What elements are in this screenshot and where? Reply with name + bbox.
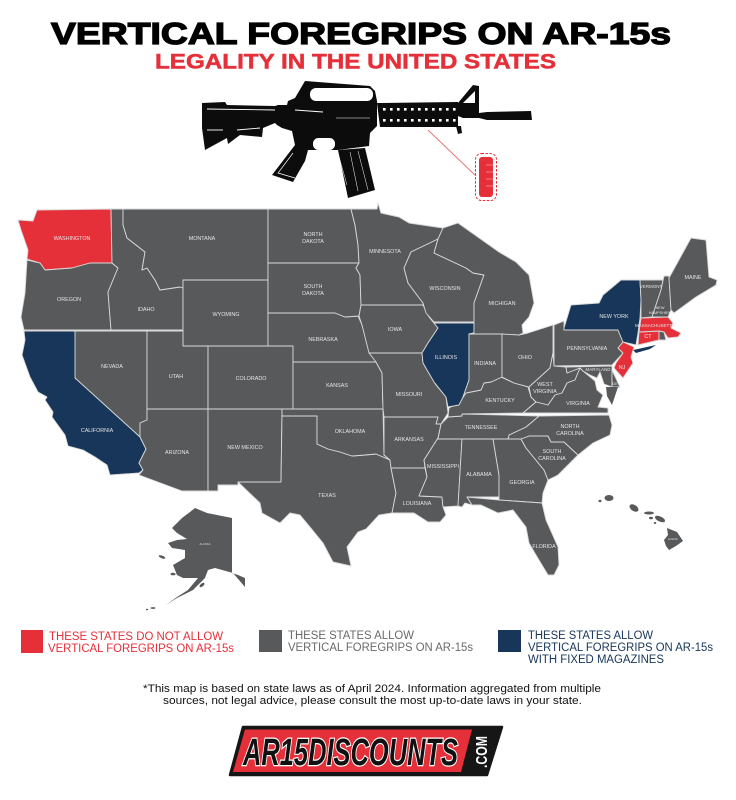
state: New Hampshire <box>649 276 672 317</box>
footnote: sources, not legal advice, please consult the most up-to-date laws in your state. <box>163 695 582 707</box>
footnote <box>143 683 601 707</box>
state: New Jersey <box>614 342 634 378</box>
state: Massachusetts <box>635 317 681 338</box>
logo: AR15Discounts.com: .COM <box>474 736 491 768</box>
state: Maryland: MARYLAND <box>586 367 611 372</box>
state: Delaware <box>612 370 620 387</box>
rifle silhouette <box>202 81 532 198</box>
state: New Hampshire: NEW <box>656 306 665 310</box>
state: North Dakota <box>268 209 359 263</box>
state: Oklahoma <box>282 409 390 460</box>
state: North Carolina <box>508 415 612 455</box>
state: Vermont <box>640 280 663 318</box>
state: New Hampshire: HAMPSHIRE <box>649 311 672 315</box>
state: New Mexico: NEW MEXICO <box>227 445 263 451</box>
state: Idaho: IDAHO <box>137 307 155 313</box>
state: Florida <box>467 497 559 575</box>
legend: allowed: VERTICAL FOREGRIPS ON AR-15s <box>288 642 473 654</box>
state: Nevada: NEVADA <box>101 364 123 370</box>
state: Nebraska: NEBRASKA <box>308 337 338 343</box>
state: North Carolina: NORTH <box>560 424 580 430</box>
state: California <box>22 331 146 475</box>
state: Montana <box>123 209 268 290</box>
state: Alabama: ALABAMA <box>466 472 492 478</box>
state: Mississippi <box>419 438 462 507</box>
state: Montana: MONTANA <box>189 236 216 242</box>
state: Colorado: COLORADO <box>236 376 266 382</box>
state: South Carolina: SOUTH <box>543 449 562 455</box>
handguard rail holes <box>383 108 456 122</box>
state: Kentucky <box>448 377 536 417</box>
legend: not allowed: VERTICAL FOREGRIPS ON AR-15s <box>48 643 234 655</box>
state: Arkansas <box>384 417 441 468</box>
state: Michigan <box>434 223 534 335</box>
legend: not allowed <box>21 630 234 655</box>
state: Virginia: VIRGINIA <box>566 401 590 407</box>
state: Washington: WASHINGTON <box>54 236 91 242</box>
state: Kansas <box>293 362 383 409</box>
legend: allowed with fixed magazines: WITH FIXED MAGAZINES <box>528 654 664 666</box>
state: Illinois <box>422 323 474 407</box>
state: Kentucky: KENTUCKY <box>485 398 515 404</box>
state: Ohio <box>502 325 553 387</box>
state: West Virginia <box>529 353 580 405</box>
state: Nebraska <box>268 313 376 362</box>
state: Arkansas: ARKANSAS <box>394 437 424 443</box>
title: VERTICAL FOREGRIPS ON AR-15s <box>51 16 671 51</box>
state: Arizona: ARIZONA <box>165 450 189 456</box>
state: South Dakota: SOUTH <box>304 284 323 290</box>
state: Colorado <box>208 346 293 409</box>
map of the United States <box>18 203 717 610</box>
foregrip <box>476 154 496 200</box>
state: Indiana <box>463 334 502 397</box>
state: New Mexico <box>208 409 282 491</box>
state: Louisiana <box>391 468 446 522</box>
state: South Dakota <box>268 263 361 317</box>
state: West Virginia: WEST <box>537 382 553 388</box>
state: Idaho <box>108 209 183 330</box>
state: South Carolina <box>521 436 578 480</box>
state: Maine <box>669 238 717 313</box>
rifle highlights <box>310 88 475 150</box>
state: North Dakota: NORTH <box>303 232 323 238</box>
state: Georgia <box>493 439 548 503</box>
state: Missouri: MISSOURI <box>396 392 422 398</box>
state: Tennessee <box>438 414 539 439</box>
logo: AR15Discounts.com <box>230 727 502 775</box>
state: Wisconsin <box>404 239 484 322</box>
state: North Dakota: DAKOTA <box>302 239 324 245</box>
legend: allowed <box>259 630 473 654</box>
icon: AR-15 rifle with highlighted foregrip <box>202 81 532 200</box>
legend: allowed with fixed magazines: THESE STATES ALLOW <box>528 630 653 642</box>
state: South Dakota: DAKOTA <box>302 291 324 297</box>
state: Hawaii: HAWAII <box>668 537 678 541</box>
state: Oregon <box>21 260 118 330</box>
state: Massachusetts: MASSACHUSETTS <box>635 323 675 328</box>
state: Oklahoma: OKLAHOMA <box>335 429 366 435</box>
state: Vermont: VERMONT <box>640 284 663 289</box>
chesapeake eastern shore <box>606 387 618 405</box>
state: Florida: FLORIDA <box>532 544 556 550</box>
state: West Virginia: VIRGINIA <box>533 389 557 395</box>
state: Louisiana: LOUISIANA <box>403 501 432 507</box>
subtitle: LEGALITY IN THE UNITED STATES <box>155 50 556 74</box>
state: Minnesota: MINNESOTA <box>369 249 401 255</box>
state: Hawaii <box>598 495 683 550</box>
state: California: CALIFORNIA <box>81 428 114 434</box>
state: Utah: UTAH <box>169 374 183 380</box>
state: Alaska <box>146 508 245 610</box>
callout line <box>428 130 476 176</box>
Long Island <box>633 345 656 353</box>
legend: not allowed: THESE STATES DO NOT ALLOW <box>49 631 223 643</box>
state: Pennsylvania: PENNSYLVANIA <box>567 346 608 352</box>
state: Kansas: KANSAS <box>326 383 348 389</box>
state: New York: NEW YORK <box>599 314 629 320</box>
footnote: *This map is based on state laws as of April 2024. Information aggregated from multiple <box>143 683 601 695</box>
state: Pennsylvania <box>554 321 623 366</box>
state: Nevada <box>75 331 147 437</box>
state: Maine: MAINE <box>684 275 702 281</box>
state: Wyoming <box>183 280 268 346</box>
state: Arizona <box>139 409 208 491</box>
state: Connecticut <box>638 331 659 345</box>
state: South Carolina: CAROLINA <box>538 456 566 462</box>
state: Alaska: ALASKA <box>200 542 211 546</box>
state: Texas: TEXAS <box>318 493 336 499</box>
state: Texas <box>238 416 396 566</box>
state: Tennessee: TENNESSEE <box>465 425 498 431</box>
state: Illinois: ILLINOIS <box>435 355 457 361</box>
state: Minnesota <box>351 203 443 305</box>
state: Oregon: OREGON <box>57 297 81 303</box>
state: Wyoming: WYOMING <box>213 312 239 318</box>
state: Missouri <box>369 353 448 424</box>
state: Maryland <box>566 366 612 387</box>
state: Virginia <box>523 368 608 413</box>
state: Washington <box>18 209 112 270</box>
state: North Carolina: CAROLINA <box>556 431 584 437</box>
state: New York <box>564 280 641 345</box>
state: Delaware: DE <box>612 381 618 386</box>
legend: allowed with fixed magazines: VERTICAL FOREGRIPS ON AR-15s <box>528 642 713 654</box>
state: Indiana: INDIANA <box>474 361 496 367</box>
state: Connecticut: CT <box>644 334 652 340</box>
state: New Jersey: NJ <box>619 365 626 371</box>
state: Michigan: MICHIGAN <box>489 301 516 307</box>
logo: AR15Discounts.com: AR15DISCOUNTS <box>242 732 458 774</box>
legend: allowed: THESE STATES ALLOW <box>288 630 414 642</box>
state: Iowa <box>359 305 438 353</box>
state: Wisconsin: WISCONSIN <box>429 286 461 292</box>
legend: allowed with fixed magazines <box>498 630 713 666</box>
state: Mississippi: MISSISSIPPI <box>427 464 459 470</box>
state: Georgia: GEORGIA <box>509 480 535 486</box>
state: Rhode Island <box>659 331 666 340</box>
state: Iowa: IOWA <box>388 327 402 333</box>
state: Ohio: OHIO <box>518 355 532 361</box>
state: Alabama <box>458 439 499 507</box>
state: Utah <box>147 331 208 409</box>
